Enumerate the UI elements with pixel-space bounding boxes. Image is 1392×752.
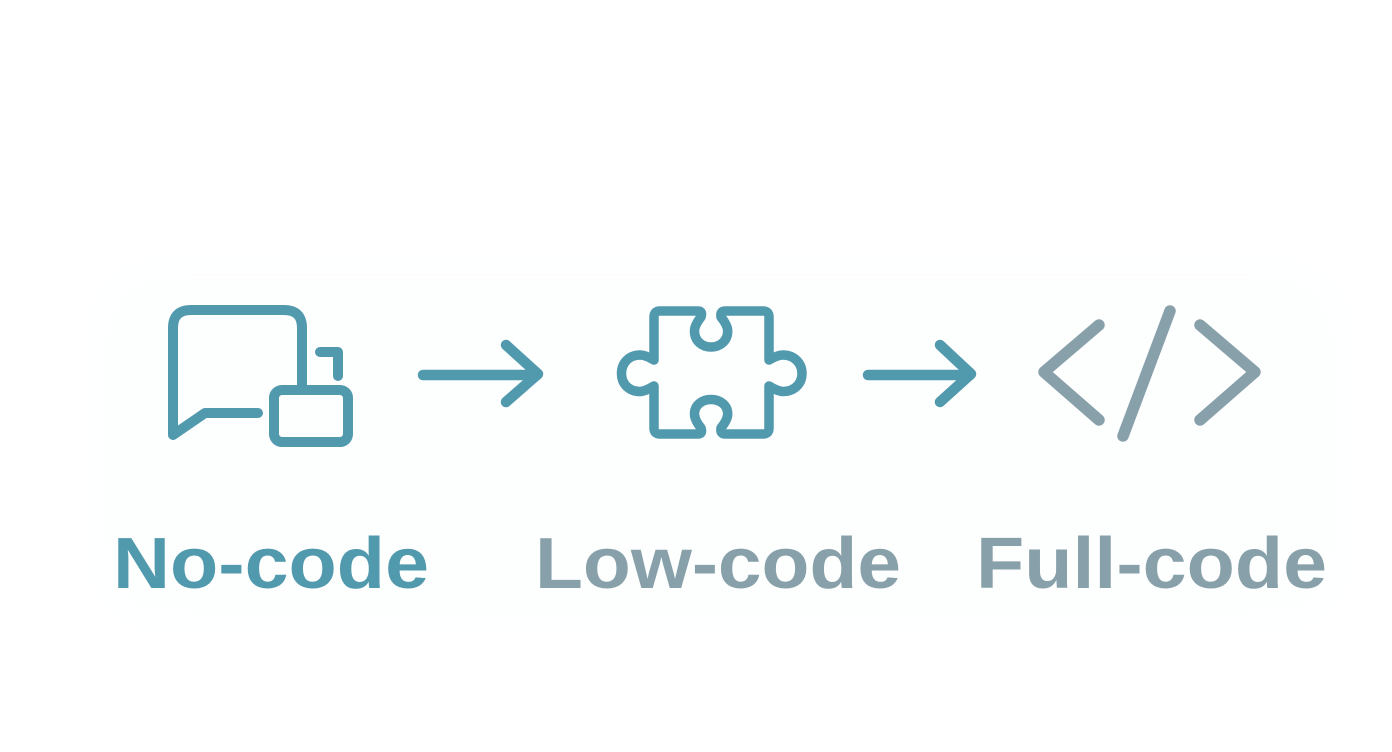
arrow: no-code to low-code	[423, 345, 538, 402]
icon: code brackets (full-code)	[1044, 311, 1255, 436]
label: No-code: No-code	[113, 524, 429, 604]
arrow: low-code to full-code	[868, 345, 971, 402]
label: Low-code: Low-code	[535, 524, 901, 604]
icon: speech bubble with box (no-code)	[173, 310, 348, 442]
icon: puzzle piece (low-code)	[622, 311, 802, 434]
label: Full-code: Full-code	[976, 524, 1327, 604]
